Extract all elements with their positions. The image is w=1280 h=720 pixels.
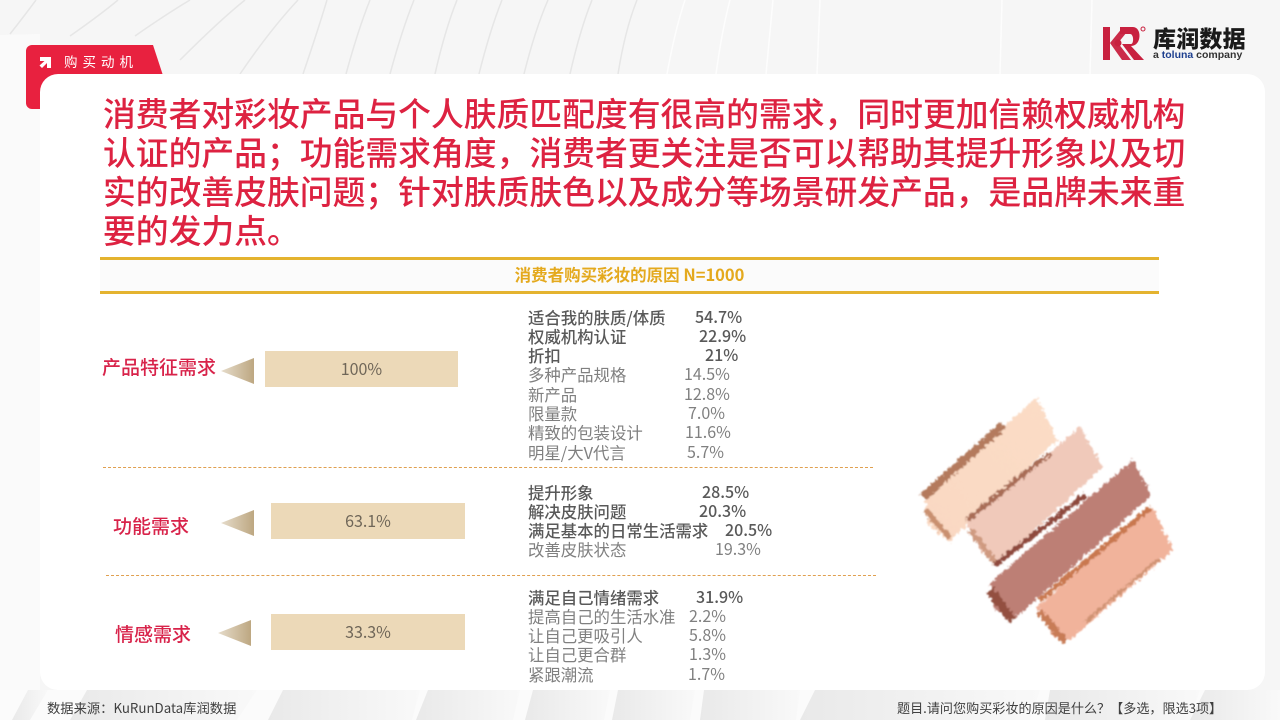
list: function: [528, 479, 772, 561]
arrow: [221, 358, 254, 384]
list: emotion: [528, 584, 743, 686]
list: emotion: 紧跟潮流: [528, 662, 594, 686]
list: function: 20.5%: [725, 517, 772, 541]
question note: 题目.请问您购买彩妆的原因是什么？【多选，限选3项】: [897, 698, 1222, 717]
list: product features: 14.5%: [684, 361, 730, 385]
list: emotion: 提高自己的生活水准: [528, 604, 676, 628]
bar 100%: [265, 351, 458, 387]
list: product features: 21%: [705, 342, 738, 366]
list: function: 解决皮肤问题: [528, 499, 626, 523]
bar 63.1%: 63.1%: [345, 508, 391, 532]
logo: [1103, 20, 1246, 61]
row: product features: [102, 351, 458, 387]
bar 100%: 100%: [341, 356, 382, 380]
list: product features: 22.9%: [699, 323, 746, 347]
headline: 消费者对彩妆产品与个人肤质匹配度有很高的需求，同时更加信赖权威机构 认证的产品；功能需求角度，消费者更关注是否可以帮助其提升形象以及切 实的改善皮肤问题；针对肤质肤色以及成分等场景研发产品，是品牌未来重 要的发力点。: [103, 89, 1185, 253]
row: emotion: [115, 614, 465, 650]
list: function: 改善皮肤状态: [528, 537, 626, 561]
list: emotion: 让自己更合群: [528, 642, 626, 666]
chart header: 消费者购买彩妆的原因 N=1000: [515, 262, 744, 286]
list: emotion: 31.9%: [696, 584, 743, 608]
list: function: 提升形象: [528, 480, 594, 504]
list: function: 20.3%: [699, 498, 746, 522]
icon: arrow: [40, 57, 51, 68]
illustration: eyeshadow swatches: [918, 397, 1174, 645]
list: product features: 适合我的肤质/体质: [528, 305, 666, 329]
chart header: [100, 257, 1159, 294]
arrow: [221, 510, 254, 536]
list: product features: 12.8%: [684, 381, 730, 405]
list: product features: 11.6%: [685, 419, 731, 443]
list: product features: 5.7%: [687, 439, 724, 463]
list: product features: 明星/大V代言: [528, 440, 626, 464]
list: product features: [528, 304, 746, 464]
list: emotion: 满足自己情绪需求: [528, 585, 659, 609]
list: emotion: 5.8%: [689, 622, 726, 646]
row: function: [113, 503, 465, 539]
list: emotion: 1.3%: [689, 641, 726, 665]
list: function: 19.3%: [715, 536, 761, 560]
list: emotion: 让自己更吸引人: [528, 623, 643, 647]
list: product features: 折扣: [528, 343, 561, 367]
list: product features: 7.0%: [688, 400, 725, 424]
list: emotion: 1.7%: [688, 661, 725, 685]
logo tagline: a toluna company: [1153, 49, 1242, 61]
list: product features: 54.7%: [695, 304, 742, 328]
category label: 产品特征需求: [102, 353, 216, 380]
bar 33.3%: [271, 614, 465, 650]
category label: 功能需求: [113, 512, 189, 539]
list: emotion: 2.2%: [689, 603, 726, 627]
logo wordmark: 库润数据: [1153, 20, 1246, 54]
list: function: 满足基本的日常生活需求: [528, 518, 708, 542]
category label: 情感需求: [115, 620, 191, 647]
section tab: [26, 45, 176, 109]
divider: [106, 575, 876, 576]
bar 33.3%: 33.3%: [345, 619, 391, 643]
tab label: 购买动机: [64, 51, 138, 71]
list: product features: 精致的包装设计: [528, 420, 643, 444]
list: product features: 限量款: [528, 401, 577, 425]
divider: [103, 467, 873, 468]
source note: 数据来源：KuRunData库润数据: [47, 698, 236, 717]
list: product features: 权威机构认证: [528, 324, 626, 348]
bar 63.1%: [271, 503, 465, 539]
icon: KR mark: [1103, 26, 1146, 60]
arrow: [218, 620, 251, 646]
list: product features: 新产品: [528, 382, 577, 406]
list: product features: 多种产品规格: [528, 362, 626, 386]
list: function: 28.5%: [702, 479, 749, 503]
